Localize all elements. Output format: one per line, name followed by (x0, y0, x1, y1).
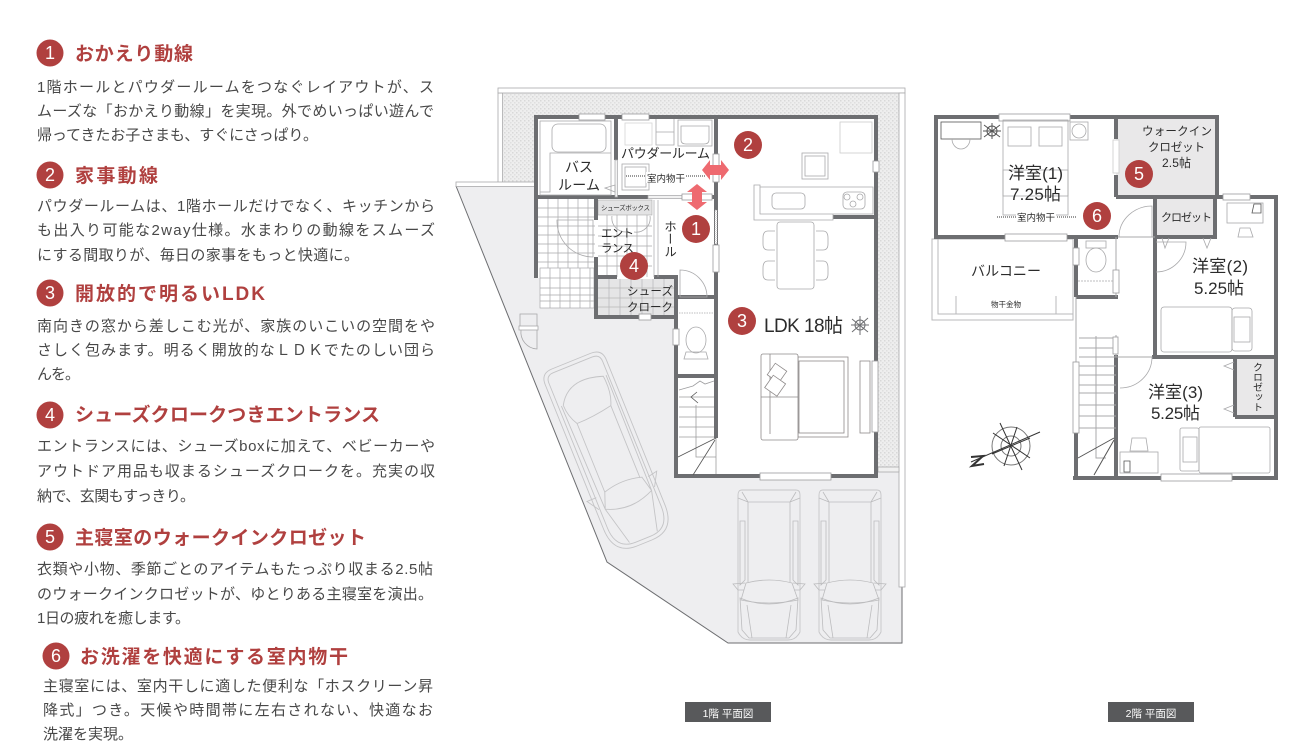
room labels: 2nd floor: 洋室(1) (1008, 164, 1063, 183)
section 4: シューズクロークつきエントランス: アウトドア用品も収まるシューズクロークを。充実の収 (37, 463, 435, 480)
boundary fence (456, 88, 905, 587)
walls (934, 117, 1278, 480)
toilet (679, 313, 714, 359)
building interior (536, 117, 876, 476)
section 2: 家事動線 (36, 162, 435, 264)
room labels: エント (601, 228, 634, 240)
marker 2 (734, 131, 762, 159)
section 3: 開放的で明るいLDK: さしく包みます。明るく開放的なＬＤＫでたのしい団ら (37, 342, 435, 359)
stairs (678, 381, 716, 475)
room labels: 2nd floor: バルコニー (971, 263, 1041, 279)
car: SUV right (814, 490, 886, 640)
section 2: 家事動線: 2 (45, 165, 55, 185)
section 2: 家事動線: も出入り可能な2way仕様。水まわりの動線をスムーズ (37, 222, 435, 239)
section 6: お洗濯を快適にする室内物干: 洗濯を実現。 (43, 726, 133, 743)
label: 1st floor: 1階 平面図 (703, 708, 753, 720)
section 1: おかえり動線: 1 (45, 43, 55, 63)
bathroom fixtures (540, 119, 712, 195)
room labels: シューズ (627, 284, 673, 298)
marker 3 (728, 307, 756, 335)
room labels: 2nd floor: クロゼット (1250, 362, 1262, 412)
car: sedan (536, 347, 680, 557)
section 5: 主寝室のウォークインクロゼット: 1日の疲れを癒します。 (37, 610, 190, 627)
section 2: 家事動線: パウダールームは、1階ホールだけでなく、キッチンから (37, 198, 435, 215)
section 6: お洗濯を快適にする室内物干: 降式」つき。天候や時間帯に左右されない、快適なお (43, 702, 433, 719)
site ground (456, 186, 902, 644)
marker 4: 4 (629, 256, 639, 276)
site boundary (456, 186, 902, 643)
doors (557, 216, 707, 297)
room labels: クローク (627, 301, 673, 314)
stair and hall light walls (1076, 237, 1155, 433)
plant (851, 316, 869, 335)
label: 2nd floor (1108, 702, 1194, 722)
section 4: シューズクロークつきエントランス: エントランスには、シューズboxに加えて、ベビーカーや (37, 438, 435, 455)
windows (999, 114, 1250, 481)
room labels: 2nd floor: 洋室(3) (1148, 383, 1203, 402)
arrow: kitchen to powder room (702, 160, 729, 180)
marker 1: 1 (691, 219, 701, 239)
garden band (503, 93, 899, 467)
furniture: room 3 (1120, 427, 1270, 473)
marker 5: 5 (1134, 164, 1144, 184)
room labels: ルーム (558, 177, 600, 193)
section 5: 主寝室のウォークインクロゼット (36, 524, 433, 627)
shoe cloak floor (598, 279, 674, 316)
doors (1119, 206, 1234, 413)
section 5: 主寝室のウォークインクロゼット: 5 (45, 527, 55, 547)
room labels: 2nd floor: 物干金物 (991, 299, 1022, 309)
section 1: おかえり動線: ムーズな「おかえり動線」を実現。外でめいっぱい遊んで (37, 103, 434, 120)
section 5: 主寝室のウォークインクロゼット: 主寝室のウォークインクロゼット (75, 526, 366, 549)
room labels: 2nd floor: 室内物干 (1017, 212, 1055, 224)
section 5: 主寝室のウォークインクロゼット: のウォークインクロゼットが、ゆとりある主寝室を演出。 (37, 586, 433, 603)
marker 6: 6 (1092, 206, 1102, 226)
dining table (763, 222, 828, 289)
room labels: 2nd floor: 5.25帖 (1194, 279, 1244, 298)
room labels: 2nd floor: 5.25帖 (1151, 404, 1200, 423)
floor plan: 1st floor (456, 88, 905, 644)
toilet: 2nd floor (1078, 241, 1114, 281)
section 4: シューズクロークつきエントランス: シューズクロークつきエントランス (75, 403, 380, 426)
section 6: お洗濯を快適にする室内物干 (42, 642, 433, 743)
walls (534, 117, 878, 478)
sofa (761, 354, 870, 440)
room labels: パウダールーム (621, 146, 710, 161)
stairs: 2nd floor (1078, 336, 1116, 475)
entry tiles (538, 199, 652, 308)
section 1: おかえり動線: おかえり動線 (75, 43, 193, 65)
section 4: シューズクロークつきエントランス: 4 (45, 405, 55, 425)
bed: room 1 (941, 120, 1088, 215)
compass (971, 423, 1040, 470)
light walls (615, 160, 682, 277)
kitchen (754, 122, 873, 220)
arrow: hall to powder room (687, 184, 707, 210)
section 3: 開放的で明るいLDK: 開放的で明るいLDK (75, 283, 265, 305)
section 1: おかえり動線: 1階ホールとパウダールームをつなぐレイアウトが、ス (37, 79, 434, 96)
room labels: 2nd floor (971, 125, 1262, 423)
outdoor fixture (519, 314, 538, 349)
section 1: おかえり動線 (36, 40, 434, 144)
car: SUV left (733, 490, 805, 640)
marker 6 (1083, 202, 1111, 230)
marker 4 (620, 252, 648, 280)
label: 2nd floor: 2階 平面図 (1126, 708, 1176, 720)
plant: room 1 (983, 123, 1001, 139)
marker 2: 2 (743, 135, 753, 155)
section 6: お洗濯を快適にする室内物干: 6 (51, 646, 61, 666)
section 1: おかえり動線: 帰ってきたお子さまも、すぐにさっぱり。 (37, 126, 318, 144)
section 3: 開放的で明るいLDK: 南向きの窓から差しこむ光が、家族のいこいの空間をや (37, 318, 435, 335)
floor plan: 2nd floor (932, 114, 1278, 481)
room labels: 2nd floor: 7.25帖 (1010, 185, 1061, 204)
shoe box (598, 200, 652, 215)
room labels: 2nd floor: 2.5帖 (1162, 155, 1191, 170)
section 3: 開放的で明るいLDK: んを。 (37, 366, 80, 383)
section 2: 家事動線: にする間取りが、毎日の家事をもっと快適に。 (37, 247, 359, 264)
section 3: 開放的で明るいLDK: 3 (45, 283, 55, 303)
marker 3: 3 (737, 311, 747, 331)
marker 5 (1125, 160, 1153, 188)
balcony (932, 239, 1073, 320)
room labels: ランス (601, 243, 634, 255)
room labels: 2nd floor: クロゼット (1148, 141, 1205, 154)
section 2: 家事動線: 家事動線 (75, 165, 158, 187)
section 6: お洗濯を快適にする室内物干: 主寝室には、室内干しに適した便利な「ホスクリーン昇 (43, 678, 433, 695)
room labels: 2nd floor: クロゼット (1161, 211, 1212, 224)
section 4: シューズクロークつきエントランス: 納で、玄関もすっきり。 (37, 488, 195, 505)
room labels: 室内物干 (647, 173, 685, 185)
room labels: 2nd floor: ウォークイン (1142, 125, 1212, 138)
room labels: ホール (662, 220, 676, 258)
section 5: 主寝室のウォークインクロゼット: 衣類や小物、季節ごとのアイテムもたっぷり収まる2.5帖 (37, 561, 433, 578)
label: 1st floor (685, 702, 771, 722)
room labels: バス (565, 159, 593, 175)
furniture: room 2 (1161, 203, 1263, 352)
windows (579, 114, 879, 480)
section 3: 開放的で明るいLDK (36, 280, 435, 383)
room labels: LDK 18帖 (764, 315, 843, 337)
section 6: お洗濯を快適にする室内物干: お洗濯を快適にする室内物干 (80, 646, 348, 668)
room labels: 2nd floor: 洋室(2) (1192, 257, 1248, 276)
section 4: シューズクロークつきエントランス (36, 402, 435, 505)
room labels: シューズボックス (601, 203, 650, 212)
room labels (558, 146, 843, 337)
closet floors (1116, 117, 1275, 417)
marker 1 (682, 215, 710, 243)
